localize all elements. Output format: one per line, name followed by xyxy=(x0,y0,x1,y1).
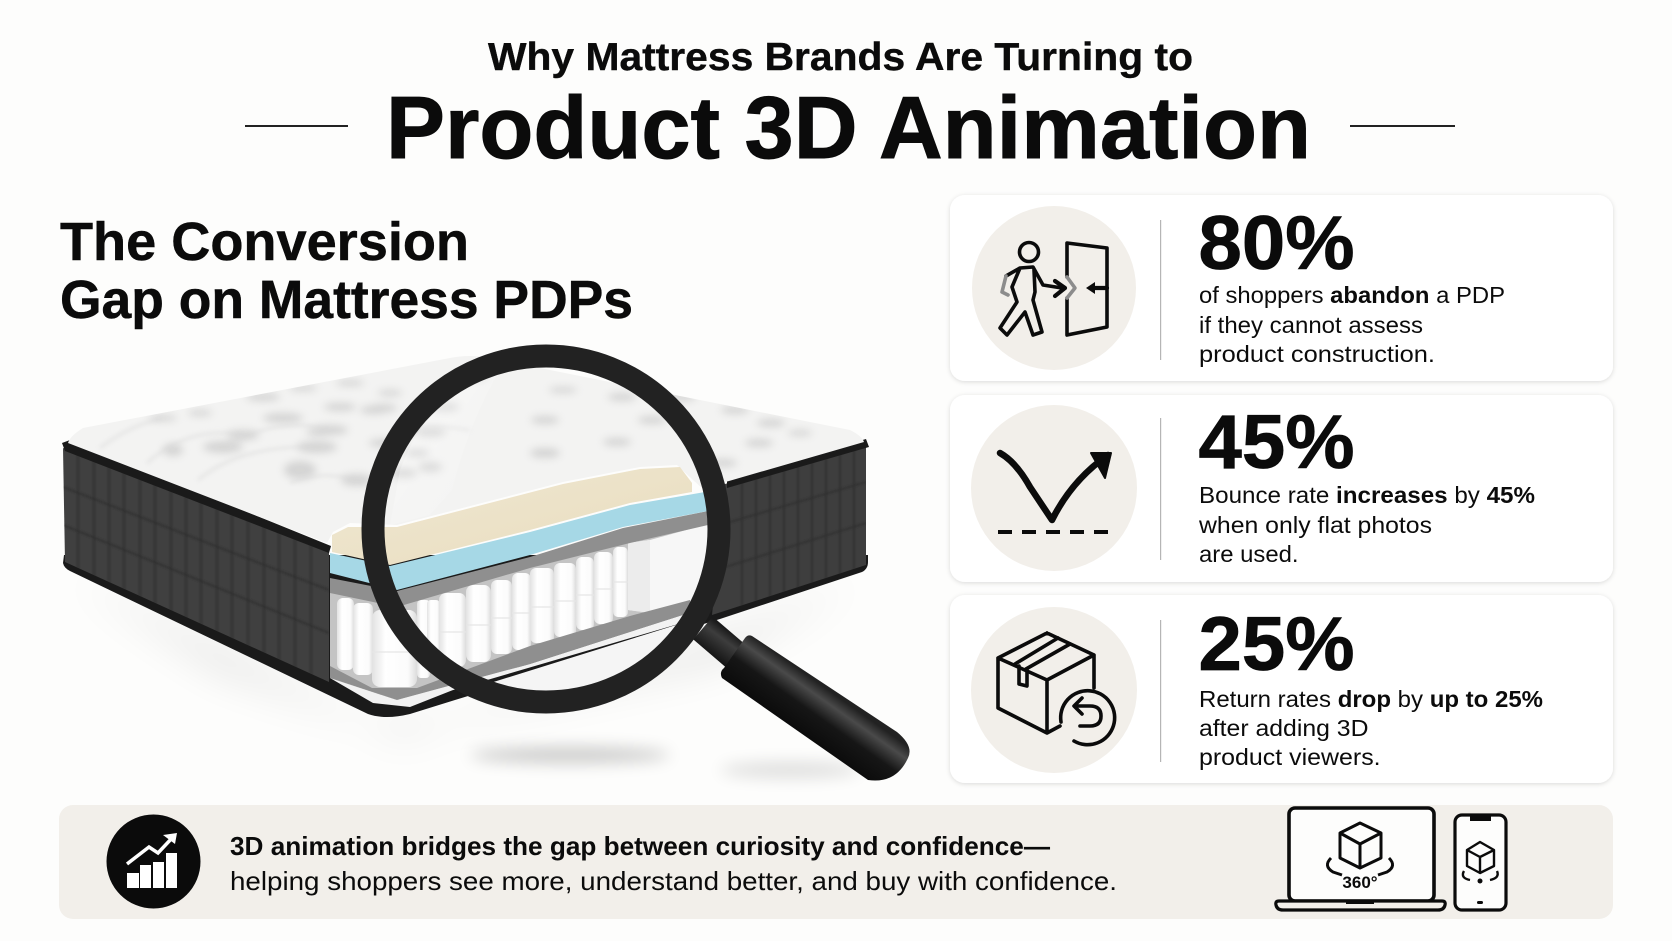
handle neck xyxy=(703,628,738,658)
heading: conversion gap: The Conversion xyxy=(60,212,469,272)
panel: stat 80% xyxy=(950,195,1613,381)
stat text xyxy=(1199,282,1505,367)
stat text: are used. xyxy=(1199,541,1298,567)
stat text: of shoppers abandon a PDP xyxy=(1199,282,1505,308)
stat text: Bounce rate increases by 45% xyxy=(1199,482,1535,508)
stat number: 80% xyxy=(1198,201,1354,286)
title rule right xyxy=(1350,125,1455,127)
cutaway: blue foam xyxy=(330,492,708,590)
illustration: mattress with magnifying glass xyxy=(62,356,910,781)
icon: shopper leaving through door xyxy=(972,206,1136,370)
cutaway: white base plate xyxy=(330,612,692,707)
stat text xyxy=(1199,686,1543,770)
icon: phone with cube xyxy=(1455,815,1506,910)
cutaway: cream foam xyxy=(332,467,692,565)
mattress left side xyxy=(63,440,329,690)
icon: growth chart badge xyxy=(106,814,200,908)
heading: conversion gap xyxy=(60,212,633,330)
title xyxy=(245,36,1455,177)
lens glass highlight xyxy=(400,428,435,474)
stat number: 25% xyxy=(1198,602,1354,687)
mattress top surface xyxy=(62,356,869,553)
magnifying glass xyxy=(373,356,910,781)
cutaway: grey felt lower xyxy=(330,600,692,700)
title line: subtitle: Why Mattress Brands Are Turning to xyxy=(488,36,1193,79)
icon: bounce arrow xyxy=(971,405,1137,571)
divider xyxy=(1160,220,1161,360)
stat text: Return rates drop by up to 25% xyxy=(1199,686,1543,712)
mattress right side xyxy=(712,440,866,620)
stat text: if they cannot assess xyxy=(1199,312,1423,338)
lens rim xyxy=(373,356,719,702)
floor shadows xyxy=(70,575,860,778)
handle grip xyxy=(721,635,910,781)
panel: takeaway banner xyxy=(59,805,1613,919)
stat text: when only flat photos xyxy=(1198,512,1432,538)
stat text: after adding 3D xyxy=(1199,715,1368,741)
title rule left xyxy=(245,125,348,127)
icon: laptop with 360 cube xyxy=(1276,808,1445,910)
stat number: 45% xyxy=(1198,400,1354,485)
banner text xyxy=(230,831,1117,896)
lens: floor seen below the mattress xyxy=(494,625,676,685)
mattress base rim xyxy=(63,555,868,717)
divider xyxy=(1160,418,1161,560)
divider xyxy=(1160,620,1161,762)
spring seams xyxy=(372,582,628,652)
heading: conversion gap: Gap on Mattress PDPs xyxy=(60,270,633,330)
banner text: 3D animation bridges the gap between curiosity and confidence— xyxy=(230,831,1050,861)
cutaway: pocket springs xyxy=(337,547,628,687)
cutaway: grey felt upper xyxy=(330,511,708,607)
banner text: helping shoppers see more, understand better, and buy with confidence. xyxy=(230,866,1117,896)
panel: stat 45% xyxy=(950,395,1613,582)
top piping xyxy=(62,439,869,553)
stat text: product viewers. xyxy=(1199,744,1381,770)
title line: main: Product 3D Animation xyxy=(386,78,1311,177)
cutaway: springs backing xyxy=(330,524,708,700)
stat text: product construction. xyxy=(1199,341,1435,367)
stat text xyxy=(1198,482,1535,567)
cutaway: foam block xyxy=(628,524,708,613)
quilting dimples xyxy=(100,374,812,486)
icon: laptop with 360 cube: 360° xyxy=(1342,873,1378,892)
icon: parcel return xyxy=(971,607,1137,773)
panel: stat 25% xyxy=(950,595,1613,783)
